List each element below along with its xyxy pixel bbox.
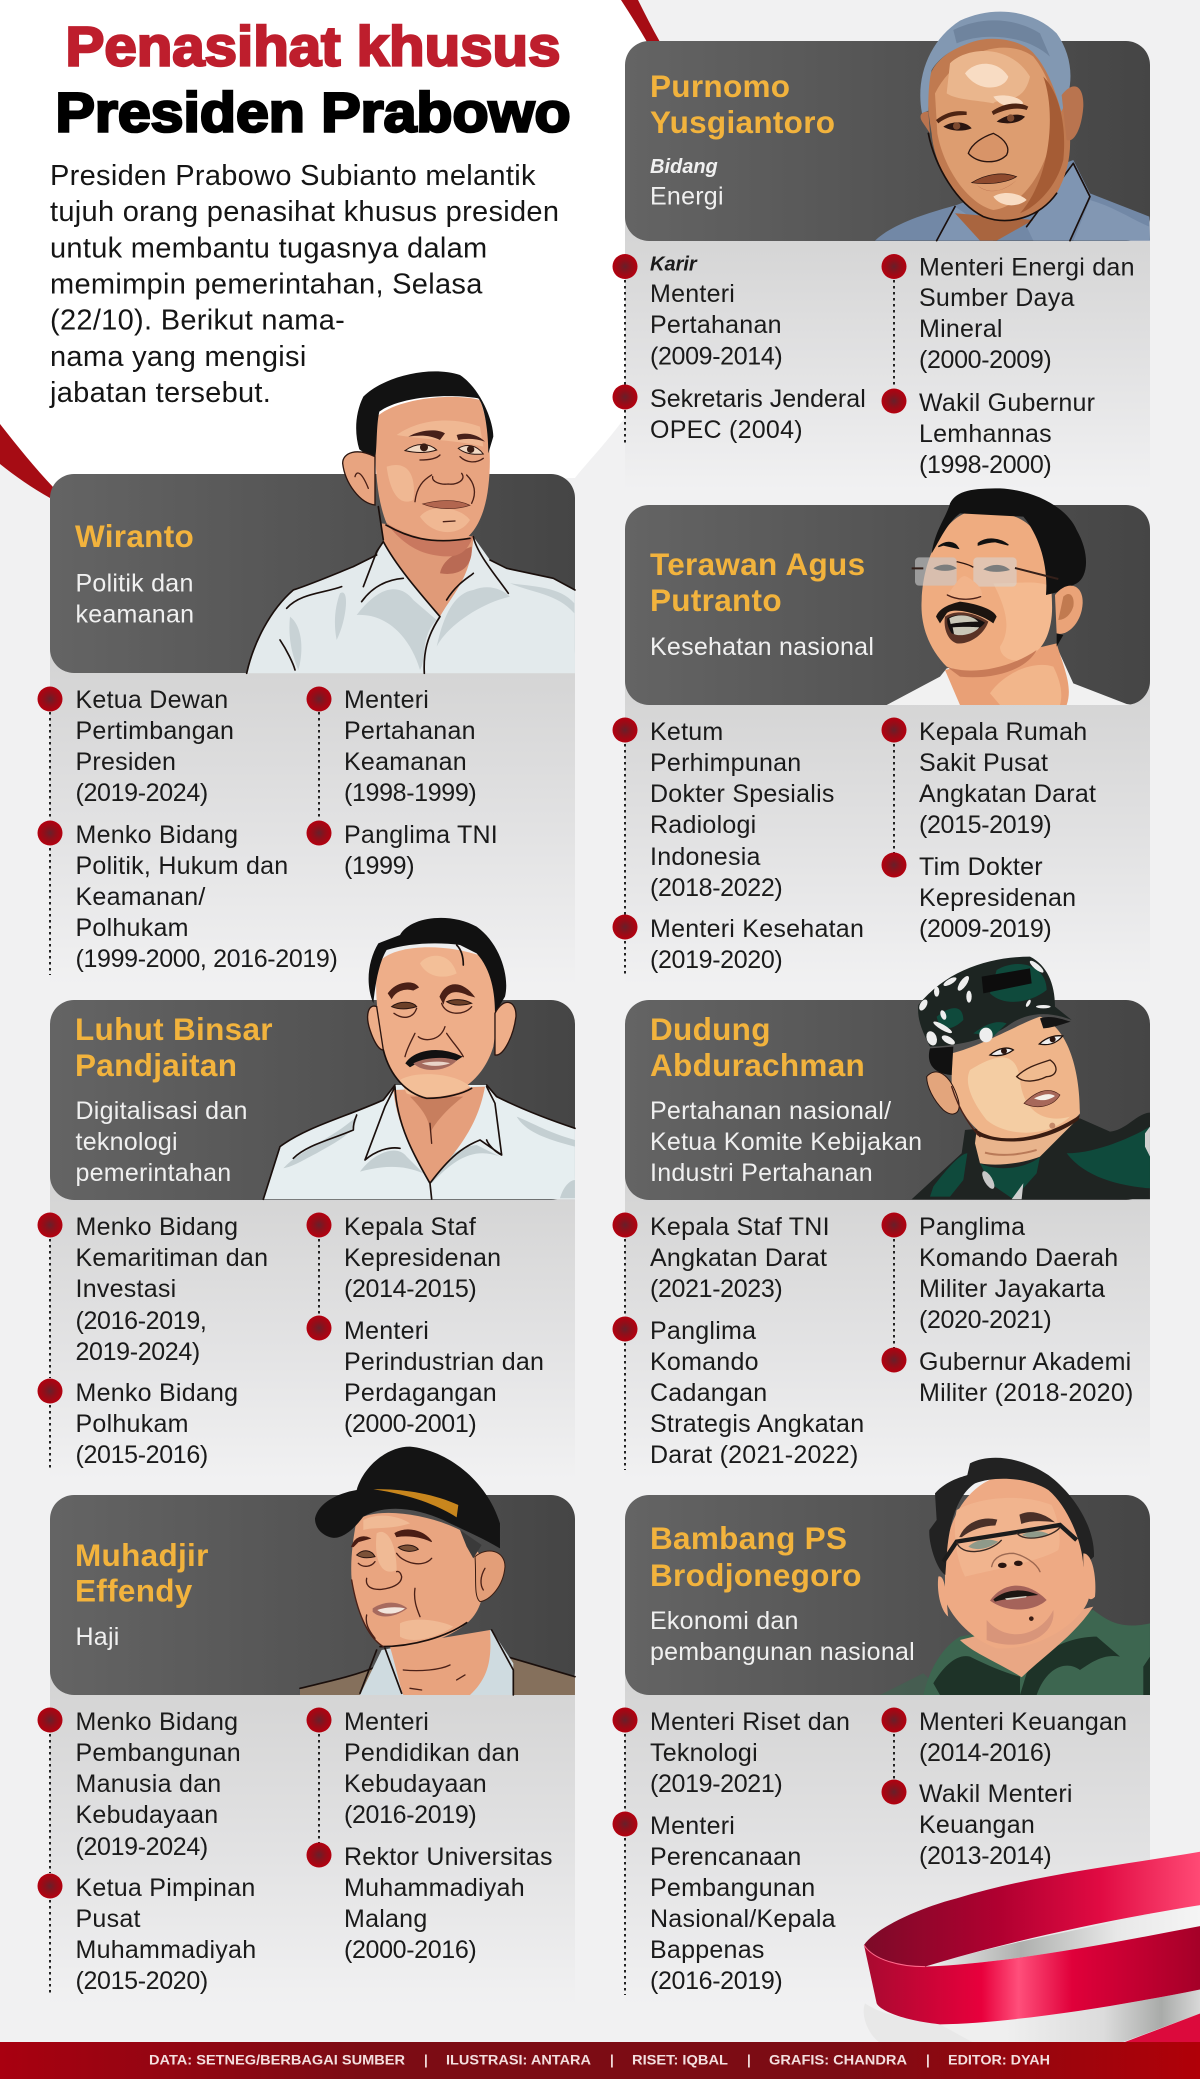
panel: Muhadjir Effendy xyxy=(38,1447,575,2005)
career column 1: Kepala Staf TNI xyxy=(650,1213,830,1241)
career column 1: Radiologi xyxy=(650,811,756,839)
career column 2: (2014-2015) xyxy=(344,1275,476,1303)
career column 2: Perdagangan xyxy=(344,1379,497,1407)
career column 1: Darat (2021-2022) xyxy=(650,1441,859,1469)
credits: GRAFIS: CHANDRA xyxy=(769,2052,907,2068)
career column 2: (2014-2016) xyxy=(919,1739,1051,1767)
name: Terawan Agus xyxy=(650,546,865,582)
career column 1: (1999-2000, 2016-2019) xyxy=(76,945,337,973)
credits: | xyxy=(747,2052,751,2068)
name: Putranto xyxy=(650,582,782,618)
bullets xyxy=(38,686,332,846)
list background xyxy=(50,1660,575,2005)
career column 2: (2013-2014) xyxy=(919,1842,1051,1870)
white header circle xyxy=(0,0,690,490)
intro paragraph: tujuh orang penasihat khusus presiden xyxy=(50,196,559,228)
name: Dudung xyxy=(650,1011,771,1047)
career column 2: Menteri xyxy=(344,686,429,714)
name: Pandjaitan xyxy=(75,1047,237,1083)
career column 1: Manusia dan xyxy=(76,1770,221,1798)
career column 1: Pembangunan xyxy=(650,1874,815,1902)
panel: Bambang PS Brodjonegoro xyxy=(612,1458,1150,2005)
career column 2: Keamanan xyxy=(344,748,467,776)
list background xyxy=(625,670,1150,985)
name: Muhadjir xyxy=(75,1537,209,1573)
career column 2: Militer (2018-2020) xyxy=(919,1379,1134,1407)
career column 1: OPEC (2004) xyxy=(650,416,803,444)
name: Effendy xyxy=(75,1572,193,1608)
career column 1: Pertahanan xyxy=(650,311,782,339)
career column 2: (2000-2009) xyxy=(919,346,1051,374)
career column 2: Kepresidenan xyxy=(919,884,1076,912)
career column 1: Menko Bidang xyxy=(76,1213,238,1241)
credits xyxy=(149,2052,1050,2068)
career column 2: Tim Dokter xyxy=(919,853,1043,881)
name: Brodjonegoro xyxy=(650,1557,862,1593)
field: Politik dan xyxy=(76,570,194,598)
credits: ILUSTRASI: ANTARA xyxy=(446,2052,591,2068)
career column 1: Menko Bidang xyxy=(76,1708,238,1736)
career column 2: (2009-2019) xyxy=(919,915,1051,943)
portrait: Bambang xyxy=(880,1458,1150,1695)
name: Bambang PS xyxy=(650,1520,847,1556)
ribbon xyxy=(864,1852,1200,2043)
bullets xyxy=(612,254,906,414)
career column 1: Kebudayaan xyxy=(76,1801,218,1829)
timeline lines xyxy=(50,712,319,975)
career column 1: Perencanaan xyxy=(650,1843,801,1871)
career column 1: Politik, Hukum dan xyxy=(76,852,288,880)
red arc bottom left xyxy=(0,424,53,498)
career column 2: Kepala Rumah xyxy=(919,718,1087,746)
bullets xyxy=(612,1708,906,1836)
career column 1: Polhukam xyxy=(76,1410,189,1438)
panel: Purnomo Yusgiantoro xyxy=(612,12,1150,490)
career column 2: (2000-2016) xyxy=(344,1936,476,1964)
name: Yusgiantoro xyxy=(650,104,835,140)
field: Industri Pertahanan xyxy=(650,1159,873,1187)
career column 2: Angkatan Darat xyxy=(919,780,1096,808)
list background xyxy=(625,1165,1150,1480)
field: Kesehatan nasional xyxy=(650,633,874,661)
field: Pertahanan nasional/ xyxy=(650,1097,891,1125)
career column 2: Sakit Pusat xyxy=(919,749,1048,777)
career column 1: Ketum xyxy=(650,718,724,746)
field label: Bidang xyxy=(650,156,718,178)
career column 2: Wakil Menteri xyxy=(919,1780,1073,1808)
career column 1: (2019-2024) xyxy=(76,779,208,807)
career column 1: Komando xyxy=(650,1348,759,1376)
career column 2: (1999) xyxy=(344,852,414,880)
career column 2: Malang xyxy=(344,1905,428,1933)
career column 1: Ketua Pimpinan xyxy=(76,1874,256,1902)
career column 2: Lemhannas xyxy=(919,420,1052,448)
portrait: Dudung xyxy=(912,957,1150,1199)
portrait: Luhut xyxy=(263,918,575,1199)
career column 2: Panglima TNI xyxy=(344,821,498,849)
career column 2: Menteri Energi dan xyxy=(919,254,1135,282)
field: Ekonomi dan xyxy=(650,1607,799,1635)
career column 1: Menteri Kesehatan xyxy=(650,915,864,943)
career column 1: (2015-2020) xyxy=(76,1967,208,1995)
credits: RISET: IQBAL xyxy=(632,2052,728,2068)
card xyxy=(625,1000,1150,1200)
list background xyxy=(625,1660,1150,2005)
career column 2: Menteri xyxy=(344,1708,429,1736)
timeline lines xyxy=(50,1239,319,1470)
career column 1: Dokter Spesialis xyxy=(650,780,835,808)
card xyxy=(50,474,575,673)
career column 2: Keuangan xyxy=(919,1811,1035,1839)
career column 1: Polhukam xyxy=(76,914,189,942)
career column 1: Cadangan xyxy=(650,1379,767,1407)
panel: Luhut Binsar Pandjaitan xyxy=(38,918,575,1480)
career column 1: Indonesia xyxy=(650,843,761,871)
career column 2: Menteri xyxy=(344,1317,429,1345)
career column 1: 2019-2024) xyxy=(76,1338,200,1366)
portrait: Wiranto xyxy=(247,371,575,673)
career column 2: Kepala Staf xyxy=(344,1213,476,1241)
list background xyxy=(50,1165,575,1480)
panel: Wiranto xyxy=(38,371,575,985)
career column 1: (2021-2023) xyxy=(650,1275,782,1303)
career column 2: Komando Daerah xyxy=(919,1244,1118,1272)
career column 1: (2018-2022) xyxy=(650,874,782,902)
portrait: Purnomo xyxy=(875,12,1150,241)
field: keamanan xyxy=(76,600,194,628)
credits: | xyxy=(926,2052,930,2068)
career column 2: (2016-2019) xyxy=(344,1801,476,1829)
title xyxy=(56,14,570,144)
career column 1: Muhammadiyah xyxy=(76,1936,256,1964)
timeline lines xyxy=(625,744,894,975)
card xyxy=(50,1000,575,1200)
card xyxy=(625,505,1150,705)
career column 1: Ketua Dewan xyxy=(76,686,228,714)
career column 2: (2000-2001) xyxy=(344,1410,476,1438)
career column 1: (2009-2014) xyxy=(650,342,782,370)
credits: EDITOR: DYAH xyxy=(948,2052,1050,2068)
career column 1: (2016-2019, xyxy=(76,1307,206,1335)
career label: Karir xyxy=(650,254,698,276)
timeline lines xyxy=(50,1734,319,1995)
career column 1: Pertimbangan xyxy=(76,717,234,745)
card xyxy=(50,1495,575,1695)
red arc top right xyxy=(621,0,660,42)
career column 2: (1998-2000) xyxy=(919,451,1051,479)
career column 2: Perindustrian dan xyxy=(344,1348,544,1376)
field: Haji xyxy=(76,1623,120,1651)
portrait: Muhadjir xyxy=(300,1447,575,1695)
career column 2: (1998-1999) xyxy=(344,779,476,807)
card xyxy=(625,41,1150,241)
title line red: Penasihat khusus xyxy=(66,14,560,78)
panel: Dudung Abdurachman xyxy=(612,957,1150,1480)
career column 2: Pertahanan xyxy=(344,717,476,745)
field: teknologi xyxy=(76,1128,178,1156)
field: pembangunan nasional xyxy=(650,1638,915,1666)
career column 2: Kepresidenan xyxy=(344,1244,501,1272)
career column 2: Panglima xyxy=(919,1213,1025,1241)
timeline lines xyxy=(625,1734,894,1995)
panel: Terawan Agus Putranto xyxy=(612,488,1150,985)
career column 2: Muhammadiyah xyxy=(344,1874,525,1902)
intro paragraph: (22/10). Berikut nama- xyxy=(50,304,345,336)
career column 1: (2015-2016) xyxy=(76,1441,208,1469)
career column 1: Strategis Angkatan xyxy=(650,1410,864,1438)
career column 2: Wakil Gubernur xyxy=(919,389,1095,417)
career column 1: Presiden xyxy=(76,748,176,776)
career column 2: Militer Jayakarta xyxy=(919,1275,1105,1303)
career column 2: Sumber Daya xyxy=(919,284,1075,312)
timeline lines xyxy=(625,280,894,445)
name: Wiranto xyxy=(75,518,194,554)
intro paragraph: nama yang mengisi xyxy=(50,341,307,373)
career column 1: Pembangunan xyxy=(76,1739,241,1767)
career column 1: (2019-2021) xyxy=(650,1770,782,1798)
field: Energi xyxy=(650,182,724,210)
career column 1: Panglima xyxy=(650,1317,756,1345)
career column 2: Gubernur Akademi xyxy=(919,1348,1131,1376)
career column 1: Sekretaris Jenderal xyxy=(650,385,866,413)
list background xyxy=(50,640,575,985)
career column 1: (2019-2024) xyxy=(76,1833,208,1861)
credits: DATA: SETNEG/BERBAGAI SUMBER xyxy=(149,2052,405,2068)
bullets xyxy=(38,1708,332,1898)
card xyxy=(625,1495,1150,1695)
career column 2: Pendidikan dan xyxy=(344,1739,520,1767)
career column 1: Perhimpunan xyxy=(650,749,801,777)
intro paragraph: untuk membantu tugasnya dalam xyxy=(50,232,488,264)
career column 1: (2019-2020) xyxy=(650,946,782,974)
career column 1: Menko Bidang xyxy=(76,1379,238,1407)
career column 2: Kebudayaan xyxy=(344,1770,487,1798)
timeline lines xyxy=(625,1239,894,1470)
name: Luhut Binsar xyxy=(75,1011,273,1047)
career column 2: (2015-2019) xyxy=(919,811,1051,839)
career column 1: Menteri xyxy=(650,280,735,308)
career column 2: Mineral xyxy=(919,315,1003,343)
career column 1: Menteri xyxy=(650,1812,735,1840)
field: pemerintahan xyxy=(76,1159,231,1187)
footer bar xyxy=(0,2042,1200,2079)
bullets xyxy=(612,1212,906,1372)
career column 1: Bappenas xyxy=(650,1936,765,1964)
intro paragraph: Presiden Prabowo Subianto melantik xyxy=(50,160,536,192)
career column 1: (2016-2019) xyxy=(650,1967,782,1995)
career column 2: Menteri Keuangan xyxy=(919,1708,1127,1736)
career column 2: (2020-2021) xyxy=(919,1306,1051,1334)
career column 2: Rektor Universitas xyxy=(344,1843,553,1871)
bullets xyxy=(612,718,906,940)
intro paragraph: jabatan tersebut. xyxy=(49,377,271,409)
field: Digitalisasi dan xyxy=(76,1097,248,1125)
intro paragraph: memimpin pemerintahan, Selasa xyxy=(50,268,483,300)
career column 1: Investasi xyxy=(76,1275,176,1303)
credits: | xyxy=(610,2052,614,2068)
career column 1: Angkatan Darat xyxy=(650,1244,827,1272)
career column 1: Nasional/Kepala xyxy=(650,1905,836,1933)
portrait: Terawan xyxy=(887,488,1133,705)
credits: | xyxy=(424,2052,428,2068)
career column 1: Keamanan/ xyxy=(76,883,206,911)
list background xyxy=(625,210,1150,490)
title line black: Presiden Prabowo xyxy=(56,80,570,144)
field: Ketua Komite Kebijakan xyxy=(650,1128,922,1156)
career column 1: Menko Bidang xyxy=(76,821,238,849)
career column 1: Teknologi xyxy=(650,1739,758,1767)
bullets xyxy=(38,1212,332,1404)
career column 1: Menteri Riset dan xyxy=(650,1708,850,1736)
name: Abdurachman xyxy=(650,1047,865,1083)
career column 1: Pusat xyxy=(76,1905,141,1933)
name: Purnomo xyxy=(650,68,790,104)
career column 1: Kemaritiman dan xyxy=(76,1244,268,1272)
